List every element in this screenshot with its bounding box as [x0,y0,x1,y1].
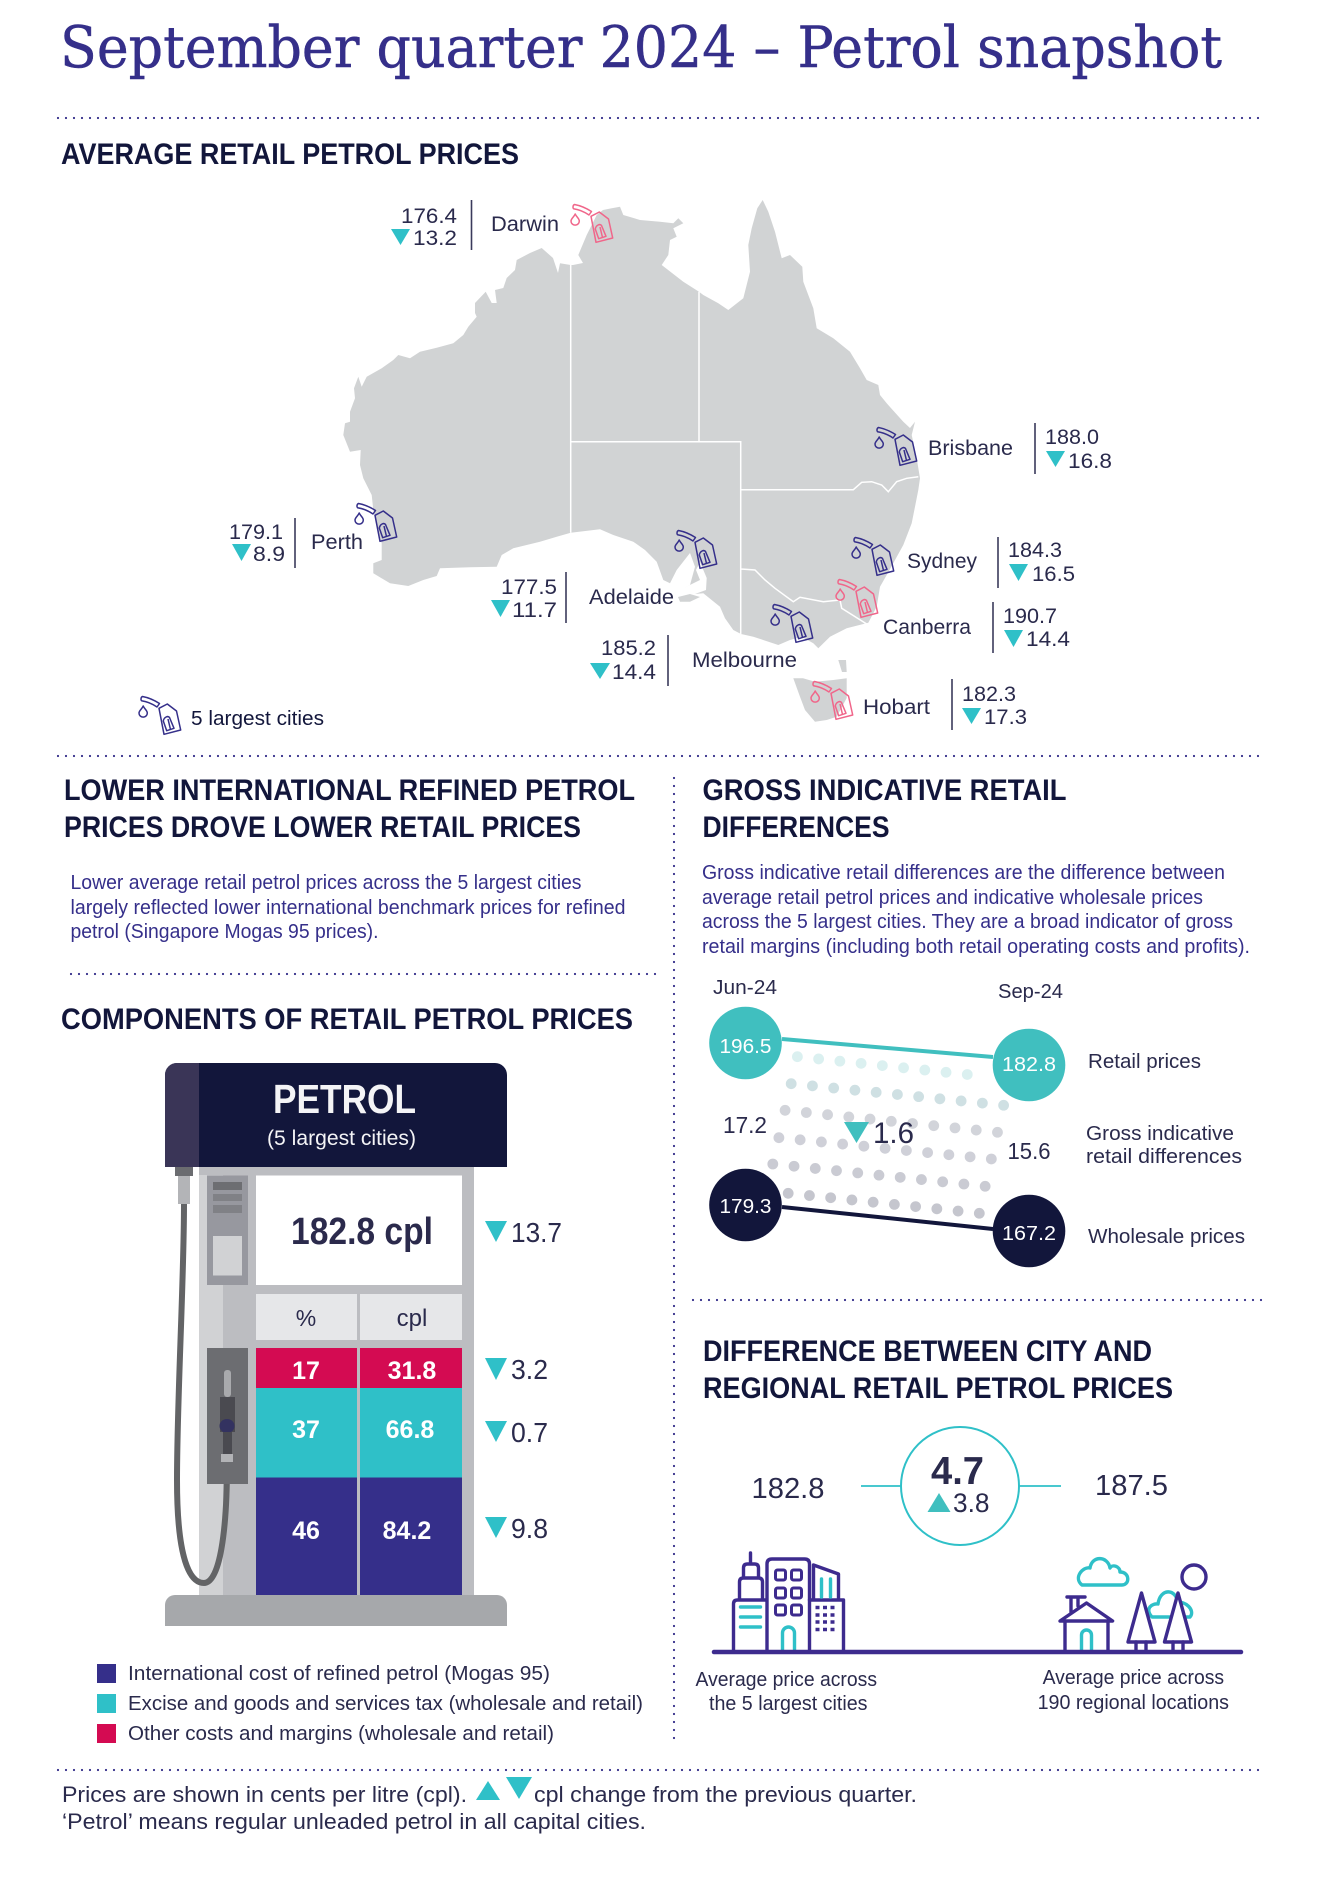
row: excise and GST: 66.8 [386,1416,434,1444]
map label: Adelaide: 177.5 [501,576,557,599]
pump nozzle [207,1348,248,1484]
icon: fuel pump Hobart [811,682,853,719]
caption: regional average: Average price across [1043,1667,1224,1689]
map label: Brisbane [875,423,1112,474]
row: excise and GST [256,1388,462,1478]
footnote [62,1777,917,1834]
heading: lower international prices: LOWER INTERNATIONAL REFINED PETROL [64,774,635,807]
row: international cost: 46 [292,1517,320,1545]
caption: city average: the 5 largest cities [709,1693,868,1715]
slope chart: gross indicative retail differences: Gross indicative [1086,1122,1234,1145]
map label: Darwin: 13.2 [413,227,457,250]
map label: Hobart [811,679,1027,730]
map label: Darwin: 176.4 [401,205,457,228]
map label: Canberra [836,580,1070,653]
map label: Hobart: Hobart [863,695,930,719]
map label: Adelaide: 11.7 [512,599,557,622]
slope chart: gross indicative retail differences: Retail prices [1088,1050,1201,1073]
map label: Melbourne: 185.2 [601,637,656,660]
icon: fuel pump Canberra [836,580,878,617]
footnote: ‘Petrol’ means regular unleaded petrol in all capital cities. [62,1809,646,1834]
title: September quarter 2024 – Petrol snapshot [60,15,1222,81]
pump head: (5 largest cities) [267,1127,416,1150]
slope chart: gross indicative retail differences: retail differences [1086,1145,1242,1168]
heading: lower international prices: PRICES DROVE LOWER RETAIL PRICES [64,811,581,844]
map label: Melbourne: Melbourne [692,648,797,672]
heading: gross indicative retail differences: DIFFERENCES [702,811,890,844]
slope chart: gross indicative retail differences: Sep-24 [998,981,1063,1003]
icon: regional house, trees and clouds [1060,1559,1206,1652]
footnote: cpl change from the previous quarter. [534,1782,917,1807]
text block: lower international prices: largely reflected lower international benchmark prices for refined [70,897,626,919]
map label: Darwin: Darwin [491,212,559,236]
map label: Perth: 8.9 [253,543,285,566]
icon: fuel pump Adelaide [675,530,717,568]
pump body [165,1167,507,1626]
map label: Canberra: 190.7 [1003,605,1057,628]
fuel pump chart [165,1063,507,1626]
slope chart: gross indicative retail differences: 167.2 [1002,1222,1056,1245]
icon: fuel pump Darwin [571,204,613,242]
icon: fuel pump Sydney [852,538,894,575]
delta: excise 0.7: 0.7 [511,1417,548,1448]
text block: gross indicative retail differences: Gross indicative retail differences are the difference between [702,862,1225,884]
pump head [165,1063,507,1167]
map label: Canberra: 14.4 [1026,628,1070,651]
pump head: PETROL [273,1076,416,1122]
map label: Brisbane: Brisbane [928,436,1013,460]
icon: fuel pump Melbourne [771,604,813,642]
city vs regional comparison: 4.7 [931,1450,984,1493]
icon: fuel pump Perth [355,504,397,541]
heading: gross indicative retail differences: GROSS INDICATIVE RETAIL [702,774,1066,807]
pump legend [97,1662,643,1745]
table header: cpl [397,1305,427,1332]
slope chart: gross indicative retail differences [709,977,1245,1267]
map label: Darwin [391,200,613,250]
heading: components of retail petrol prices: COMPONENTS OF RETAIL PETROL PRICES [61,1003,633,1036]
slope chart: gross indicative retail differences: 15.6 [1008,1138,1050,1164]
text block: gross indicative retail differences [702,862,1250,958]
map label: Hobart: 17.3 [984,706,1027,729]
map legend: 5 largest cities: 5 largest cities [191,708,324,730]
heading: gross indicative retail differences [702,774,1066,844]
map label: Perth [229,504,397,568]
pump legend: International cost of refined petrol (Mogas 95) [128,1662,550,1685]
text block: lower international prices: Lower average retail petrol prices across the 5 largest cities [70,872,582,894]
slope chart: gross indicative retail differences: 17.2 [723,1112,767,1138]
map label: Melbourne [590,604,813,686]
map label: Sydney: 16.5 [1032,563,1075,586]
row: excise and GST: 37 [292,1416,320,1444]
text block: gross indicative retail differences: across the 5 largest cities. They are a broad indicator of gross [702,911,1233,933]
pump legend: Other costs and margins (wholesale and retail) [128,1722,554,1745]
heading: difference between city and regional [703,1335,1173,1405]
map legend: 5 largest cities [139,696,324,734]
slope chart: gross indicative retail differences: Wholesale prices [1088,1225,1245,1248]
text block: gross indicative retail differences: retail margins (including both retail operating costs and profits). [702,936,1250,958]
caption: city average [696,1669,877,1715]
caption: city average: Average price across [696,1669,877,1691]
map label: Sydney: Sydney [907,549,977,573]
slope chart: gross indicative retail differences: 179.3 [720,1195,772,1218]
map label: Perth: 179.1 [229,521,283,544]
row: international cost [256,1478,462,1595]
city vs regional comparison: 182.8 [752,1473,824,1505]
map label: Hobart: 182.3 [962,683,1016,706]
icon: city buildings [734,1553,844,1652]
pump hose [175,1167,227,1583]
map label: Brisbane: 188.0 [1045,426,1099,449]
map label: Perth: Perth [311,530,363,554]
heading: lower international prices [64,774,635,844]
row: other costs and margins: 17 [292,1357,320,1385]
slope chart: gross indicative retail differences: 196.5 [720,1035,772,1058]
delta: international 9.8 [485,1513,548,1544]
pump display panel [207,1176,248,1285]
heading: average retail petrol prices: AVERAGE RETAIL PETROL PRICES [61,138,519,171]
footnote: Prices are shown in cents per litre (cpl). [62,1782,467,1807]
pump legend: Excise and goods and services tax (wholesale and retail) [128,1692,643,1715]
map label: Brisbane: 16.8 [1068,450,1112,473]
delta: total 13.7 [485,1217,562,1248]
map label: Sydney: 184.3 [1008,539,1062,562]
caption: regional average [1038,1667,1229,1714]
slope chart: gross indicative retail differences: 182.8 [1002,1053,1056,1076]
city vs regional comparison [752,1427,1168,1545]
map of Australia [343,200,920,722]
map label: Canberra: Canberra [883,615,971,639]
city vs regional comparison: 3.8 [953,1488,990,1518]
icon: fuel pump Brisbane [875,428,917,465]
row: other costs and margins [256,1348,462,1388]
heading: difference between city and regional: REGIONAL RETAIL PETROL PRICES [703,1372,1173,1405]
heading: difference between city and regional: DIFFERENCE BETWEEN CITY AND [703,1335,1152,1368]
table header: % [296,1305,316,1331]
map label: Melbourne: 14.4 [612,661,656,684]
delta: international 9.8: 9.8 [511,1513,548,1544]
delta: other 3.2: 3.2 [511,1354,548,1385]
map label: Adelaide: Adelaide [589,585,674,609]
delta: other 3.2 [485,1354,548,1385]
text block: gross indicative retail differences: average retail petrol prices and indicative wholesale prices [702,887,1203,909]
total price screen [256,1176,462,1285]
city vs regional comparison: 187.5 [1095,1470,1168,1502]
text block: lower international prices: petrol (Singapore Mogas 95 prices). [70,921,378,943]
slope chart: gross indicative retail differences: 1.6 [873,1117,914,1150]
map label: Adelaide [491,530,717,623]
row: other costs and margins: 31.8 [388,1357,436,1385]
delta: total 13.7: 13.7 [511,1217,562,1248]
icon: fuel pump legend [139,696,181,734]
total price screen: 182.8 cpl [291,1211,433,1253]
table header [256,1294,462,1340]
delta: excise 0.7 [485,1417,548,1448]
row: international cost: 84.2 [383,1517,431,1545]
map label: Sydney [852,537,1075,588]
caption: regional average: 190 regional locations [1038,1692,1229,1714]
slope chart: gross indicative retail differences: Jun-24 [713,977,777,999]
text block: lower international prices [70,872,626,943]
